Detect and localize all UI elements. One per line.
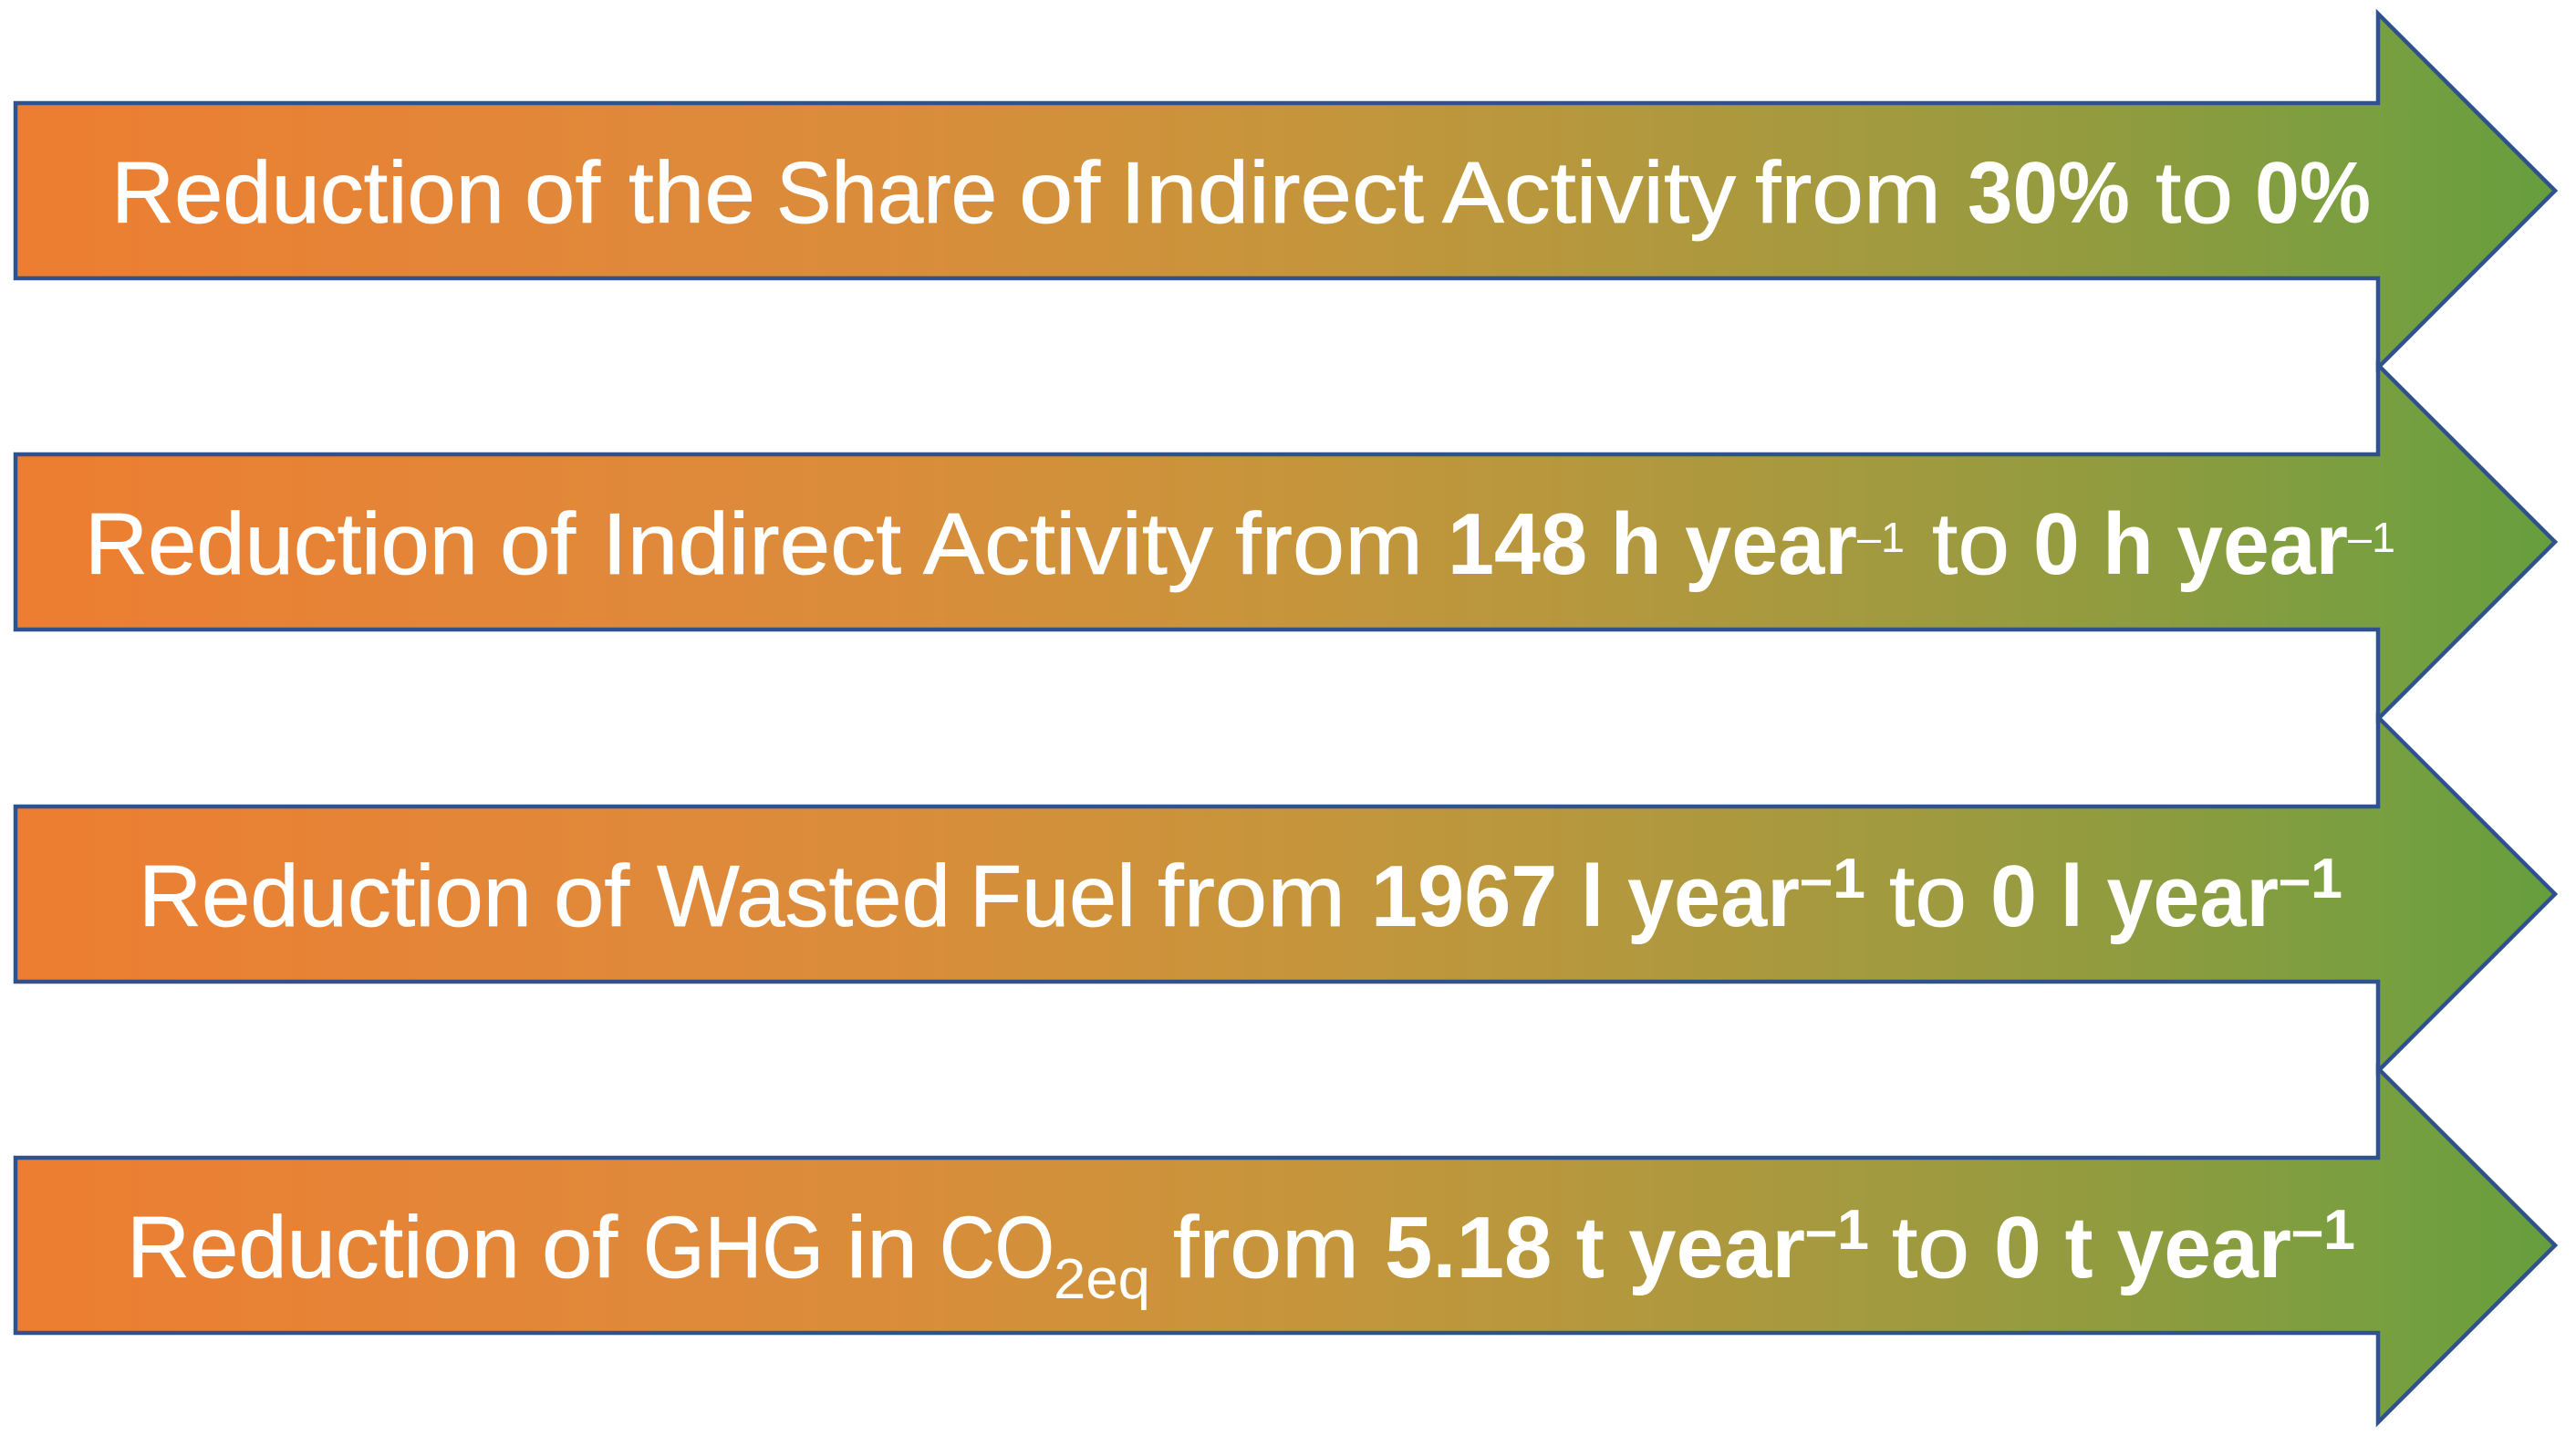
arrow shape 1 (16, 14, 2555, 368)
arrow 1 label: 30% (1968, 144, 2130, 242)
arrow 2 label: –1 (1857, 514, 1905, 561)
arrow 1 label (111, 144, 2371, 242)
arrow 3 label: –1 (1800, 848, 1865, 911)
arrow 2 label: to (1932, 495, 2010, 593)
arrow 4 label (127, 1199, 2355, 1311)
arrow 2 label: 148 h year (1448, 495, 1857, 593)
arrow 4 label: 5.18 t year (1385, 1199, 1805, 1296)
arrow 3 label: 0 l year (1990, 848, 2279, 945)
arrow 4 label: Reduction (127, 1199, 520, 1296)
arrow 1 label: Share (776, 144, 997, 242)
arrow shape 4 (16, 1068, 2555, 1422)
arrow 3 label: to (1889, 848, 1967, 945)
arrow 1 label: of (525, 144, 600, 242)
arrow 3 label: Wasted (657, 848, 950, 945)
arrow 3 label: Reduction (139, 848, 532, 945)
arrow 1 label: Activity (1442, 144, 1736, 242)
arrow 4 label: 2eq (1054, 1248, 1150, 1311)
arrow 4 label: in (847, 1199, 918, 1296)
arrow 3 label (139, 848, 2342, 945)
arrow 4 label: –1 (1805, 1199, 1869, 1262)
arrow 4 label: GHG (643, 1199, 824, 1296)
arrow 3 label: Fuel (970, 848, 1136, 945)
arrow 3: wasted fuel (16, 717, 2555, 1071)
arrow 3 label: 1967 l year (1371, 848, 1800, 945)
arrow 3 label: –1 (2279, 848, 2342, 911)
arrow 2 label: 0 h year (2033, 495, 2348, 593)
arrow 1 label: to (2155, 144, 2233, 242)
arrow 2 label: Reduction (85, 495, 478, 593)
arrow 2: indirect activity hours (16, 365, 2555, 719)
arrow 1: share of indirect activity (16, 14, 2555, 368)
arrow 1 label: 0% (2255, 144, 2371, 242)
arrow 3 label: of (554, 848, 629, 945)
arrow 2 label: –1 (2348, 514, 2395, 561)
arrow 2 label: Indirect (602, 495, 901, 593)
arrow 4 label: 0 t year (1994, 1199, 2291, 1296)
arrow 1 label: from (1755, 144, 1941, 242)
arrow 4 label: from (1173, 1199, 1359, 1296)
arrow 1 label: the (628, 144, 755, 242)
arrow 1 label: Reduction (111, 144, 504, 242)
arrow 4 label: of (542, 1199, 618, 1296)
arrow 4 label: CO (940, 1199, 1054, 1296)
arrow 4 label: to (1892, 1199, 1969, 1296)
arrow 1 label: of (1019, 144, 1100, 242)
arrow 3 label: from (1158, 848, 1345, 945)
arrow shape 3 (16, 717, 2555, 1071)
arrow 1 label: Indirect (1120, 144, 1424, 242)
arrow 2 label: Activity (923, 495, 1213, 593)
arrow shape 2 (16, 365, 2555, 719)
arrow 2 label (85, 495, 2395, 593)
arrow 4: greenhouse gas (16, 1068, 2555, 1422)
arrow 4 label: –1 (2291, 1199, 2355, 1262)
arrow 2 label: of (500, 495, 576, 593)
arrow 2 label: from (1235, 495, 1423, 593)
